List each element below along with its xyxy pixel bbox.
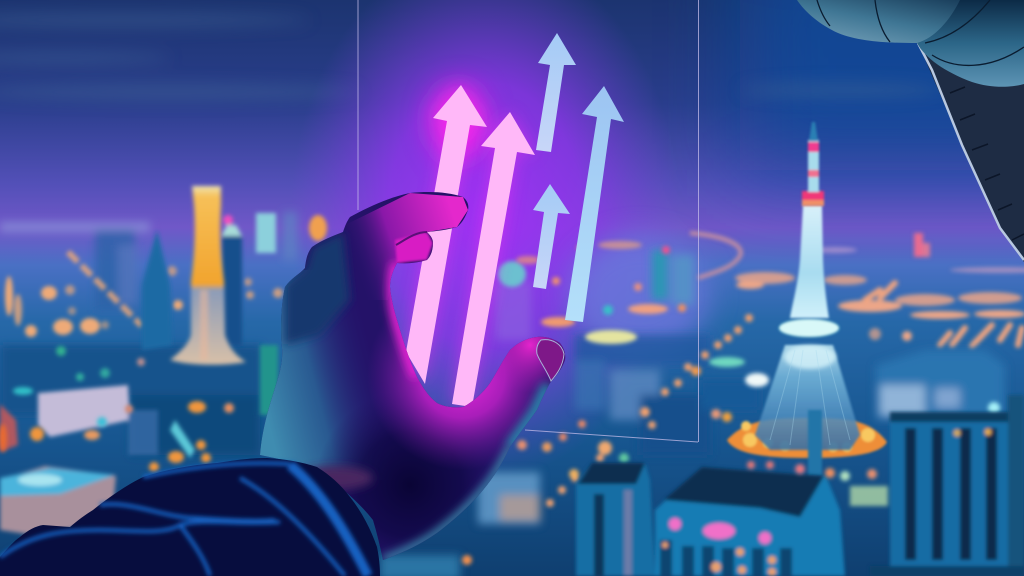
clouds: [0, 13, 940, 100]
neon sign: [669, 518, 771, 544]
teal tower: [652, 250, 668, 300]
middle city: [380, 250, 760, 576]
thumb magenta: [502, 336, 566, 388]
lower right buildings: [576, 395, 1024, 576]
back of hand blue light: [260, 270, 366, 472]
orange podium: [727, 418, 887, 458]
pink arrow right: [452, 112, 535, 407]
lights below podium: [747, 461, 888, 506]
soft mid blocks: [128, 410, 158, 455]
tower column: [808, 410, 822, 476]
thumb blue shadow: [510, 385, 548, 447]
right background building: [876, 350, 1005, 420]
middle finger magenta: [395, 232, 433, 263]
left city lights: [0, 346, 234, 472]
sleeve: [0, 458, 380, 576]
tower mast: [790, 205, 829, 318]
pink arrow left: [406, 85, 487, 384]
tower flare: [755, 345, 860, 450]
blue arrow right: [565, 86, 624, 322]
tower flare highlight: [784, 345, 836, 369]
tall building right: [890, 412, 1008, 568]
tower antenna: [802, 122, 824, 206]
left orange tower: [170, 186, 246, 365]
middle city lights: [462, 233, 769, 565]
wing lower panel: [918, 43, 1024, 262]
purple block: [495, 280, 531, 340]
rear dark tower with pink tip: [221, 215, 242, 346]
left lower city: [0, 345, 278, 458]
right lit district: [735, 233, 1024, 346]
aircraft wing top right: [797, 0, 1024, 262]
dark band behind towers: [0, 345, 262, 415]
teal column: [260, 345, 278, 415]
bottom left rooftop: [0, 466, 116, 536]
blue arrow small: [533, 184, 570, 289]
blue arrow top: [536, 33, 576, 152]
glass panel edges: [358, 0, 698, 442]
right tower: [727, 122, 887, 476]
glow behind glass panel: [290, 0, 680, 480]
small mid building: [576, 463, 655, 576]
left blue spire: [142, 230, 172, 350]
lower edge teal rim: [383, 447, 510, 560]
distant left city: [0, 212, 297, 455]
dark fingers: [285, 232, 350, 345]
finger crease: [396, 232, 427, 245]
index finger magenta: [345, 193, 468, 300]
thumb nail: [537, 340, 564, 381]
dome: [498, 261, 526, 287]
soft lower block: [478, 472, 540, 524]
central rooftop building: [655, 467, 845, 576]
engine lobe left: [797, 0, 1024, 43]
cyan beacon: [988, 402, 1000, 414]
arrow glow: [432, 86, 484, 158]
inner magenta glow: [373, 326, 550, 465]
palm dark core: [324, 416, 486, 552]
tower ring: [779, 319, 839, 337]
finger side glow: [393, 263, 417, 377]
hand: [260, 192, 566, 560]
dark blocks: [575, 335, 710, 365]
sky right blue tint: [740, 0, 1024, 170]
wrist plum patch: [297, 466, 373, 490]
seams: [817, 0, 1024, 65]
engine lobe right: [917, 0, 1024, 87]
periwinkle haze over middle city: [570, 235, 710, 355]
left street grid lights: [5, 213, 327, 337]
